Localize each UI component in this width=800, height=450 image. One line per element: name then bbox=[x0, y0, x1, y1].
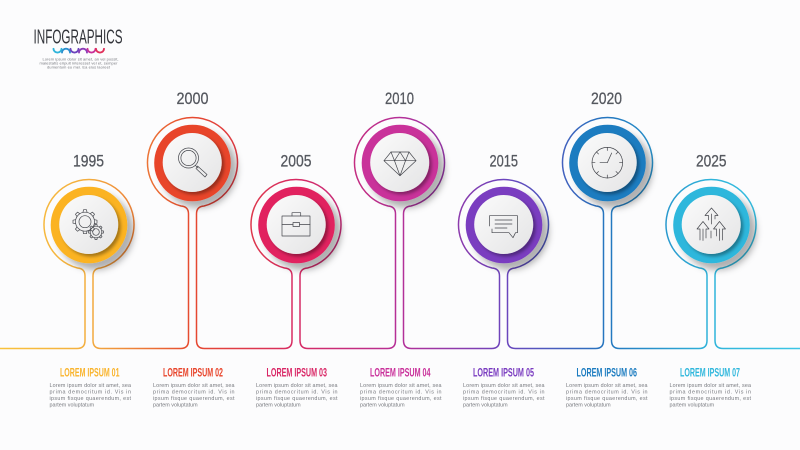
icon: arrows bbox=[697, 208, 726, 240]
year 2010: 2010 bbox=[385, 89, 414, 108]
white disc bbox=[578, 133, 637, 192]
body 02: prima democritum id. Vis in bbox=[153, 390, 234, 396]
body 03: Lorem ipsum dolor sit amet, sea bbox=[256, 383, 338, 389]
title block bbox=[34, 26, 122, 70]
white disc bbox=[682, 195, 741, 254]
body 04: partem voluptatum bbox=[360, 403, 405, 409]
year 2015: 2015 bbox=[490, 152, 518, 171]
icon: clock bbox=[592, 147, 623, 178]
body 07: ipsum fisque quaerendum, est bbox=[670, 396, 752, 402]
white disc bbox=[474, 195, 533, 254]
icon: diamond bbox=[384, 152, 416, 176]
node 4: 2010 bbox=[362, 89, 438, 201]
node 6: 2020 bbox=[569, 89, 646, 201]
title description: Lorem ipsum dolor sit amet, an vel possit, bbox=[42, 56, 118, 62]
body 06: ipsum fisque quaerendum, est bbox=[566, 396, 648, 402]
blue disc bbox=[569, 125, 646, 201]
heading 04: LOREM IPSUM 04 bbox=[370, 368, 431, 380]
year 1995: 1995 bbox=[73, 152, 104, 171]
body 03: ipsum fisque quaerendum, est bbox=[256, 396, 338, 402]
icon: chat bubble bbox=[490, 216, 518, 238]
timeline line with rings bbox=[0, 117, 800, 348]
cyan disc bbox=[673, 187, 750, 263]
caption 02 bbox=[153, 368, 235, 409]
title description: dumentum eu mei. Ea eius laoreet bbox=[47, 64, 111, 70]
body 06: partem voluptatum bbox=[566, 403, 611, 409]
body 04: Lorem ipsum dolor sit amet, sea bbox=[360, 383, 442, 389]
node 1: 1995 bbox=[51, 152, 127, 263]
heading 06: LOREM IPSUM 06 bbox=[576, 368, 637, 380]
body 07 bbox=[670, 383, 752, 409]
year 2020: 2020 bbox=[591, 89, 622, 108]
caption 05 bbox=[463, 368, 545, 409]
icon: magnifier bbox=[178, 148, 207, 177]
body 01: Lorem ipsum dolor sit amet, sea bbox=[50, 383, 131, 389]
icon: gears bbox=[73, 210, 104, 240]
year 2025: 2025 bbox=[696, 152, 726, 171]
yellow disc bbox=[51, 187, 127, 263]
caption 07 bbox=[670, 368, 752, 409]
body 05 bbox=[463, 383, 545, 409]
body 07: partem voluptatum bbox=[670, 403, 715, 409]
title description: maiestatis eripuit interesset vel et, semper bbox=[40, 60, 118, 66]
heading 07: LOREM IPSUM 07 bbox=[680, 368, 740, 380]
body 02 bbox=[153, 383, 235, 409]
heading 03: LOREM IPSUM 03 bbox=[266, 368, 327, 380]
body 05: prima democritum id. Vis in bbox=[463, 390, 544, 396]
white disc bbox=[370, 133, 429, 192]
year 2005: 2005 bbox=[280, 152, 312, 171]
body 02: Lorem ipsum dolor sit amet, sea bbox=[153, 383, 234, 389]
title: INFOGRAPHICS bbox=[34, 26, 122, 48]
body 06 bbox=[566, 383, 648, 409]
body 02: partem voluptatum bbox=[153, 403, 198, 409]
body 06: prima democritum id. Vis in bbox=[566, 390, 648, 396]
node 5: 2015 bbox=[466, 152, 542, 263]
caption 04 bbox=[360, 368, 442, 409]
red disc bbox=[154, 125, 231, 201]
body 01 bbox=[50, 383, 132, 409]
icon: briefcase bbox=[282, 213, 310, 236]
body 04 bbox=[360, 383, 442, 409]
crimson disc bbox=[258, 187, 335, 263]
purple disc bbox=[466, 187, 542, 263]
node 3: 2005 bbox=[258, 152, 335, 263]
caption 06 bbox=[566, 368, 648, 409]
body 06: Lorem ipsum dolor sit amet, sea bbox=[566, 383, 648, 389]
body 07: Lorem ipsum dolor sit amet, sea bbox=[670, 383, 751, 389]
white disc bbox=[267, 195, 326, 254]
caption 03 bbox=[256, 368, 338, 409]
title squiggle bbox=[54, 49, 104, 53]
title description bbox=[40, 56, 118, 70]
body 03: prima democritum id. Vis in bbox=[256, 390, 338, 396]
heading 02: LOREM IPSUM 02 bbox=[163, 368, 223, 380]
body 02: ipsum fisque quaerendum, est bbox=[153, 396, 235, 402]
magenta disc bbox=[362, 125, 438, 201]
heading 01: LOREM IPSUM 01 bbox=[60, 368, 120, 380]
body 03: partem voluptatum bbox=[256, 403, 301, 409]
white disc bbox=[163, 133, 222, 192]
white disc bbox=[59, 195, 118, 254]
body 01: ipsum fisque quaerendum, est bbox=[50, 396, 132, 402]
body 04: ipsum fisque quaerendum, est bbox=[360, 396, 442, 402]
body 07: prima democritum id. Vis in bbox=[670, 390, 751, 396]
year 2000: 2000 bbox=[176, 89, 208, 108]
body 05: partem voluptatum bbox=[463, 403, 508, 409]
body 01: partem voluptatum bbox=[50, 403, 95, 409]
node 7: 2025 bbox=[673, 152, 750, 263]
body 05: ipsum fisque quaerendum, est bbox=[463, 396, 545, 402]
heading 05: LOREM IPSUM 05 bbox=[473, 368, 534, 380]
caption 01 bbox=[50, 368, 132, 409]
body 01: prima democritum id. Vis in bbox=[50, 390, 131, 396]
body 05: Lorem ipsum dolor sit amet, sea bbox=[463, 383, 544, 389]
body 03 bbox=[256, 383, 338, 409]
body 04: prima democritum id. Vis in bbox=[360, 390, 442, 396]
node 2: 2000 bbox=[154, 89, 231, 201]
